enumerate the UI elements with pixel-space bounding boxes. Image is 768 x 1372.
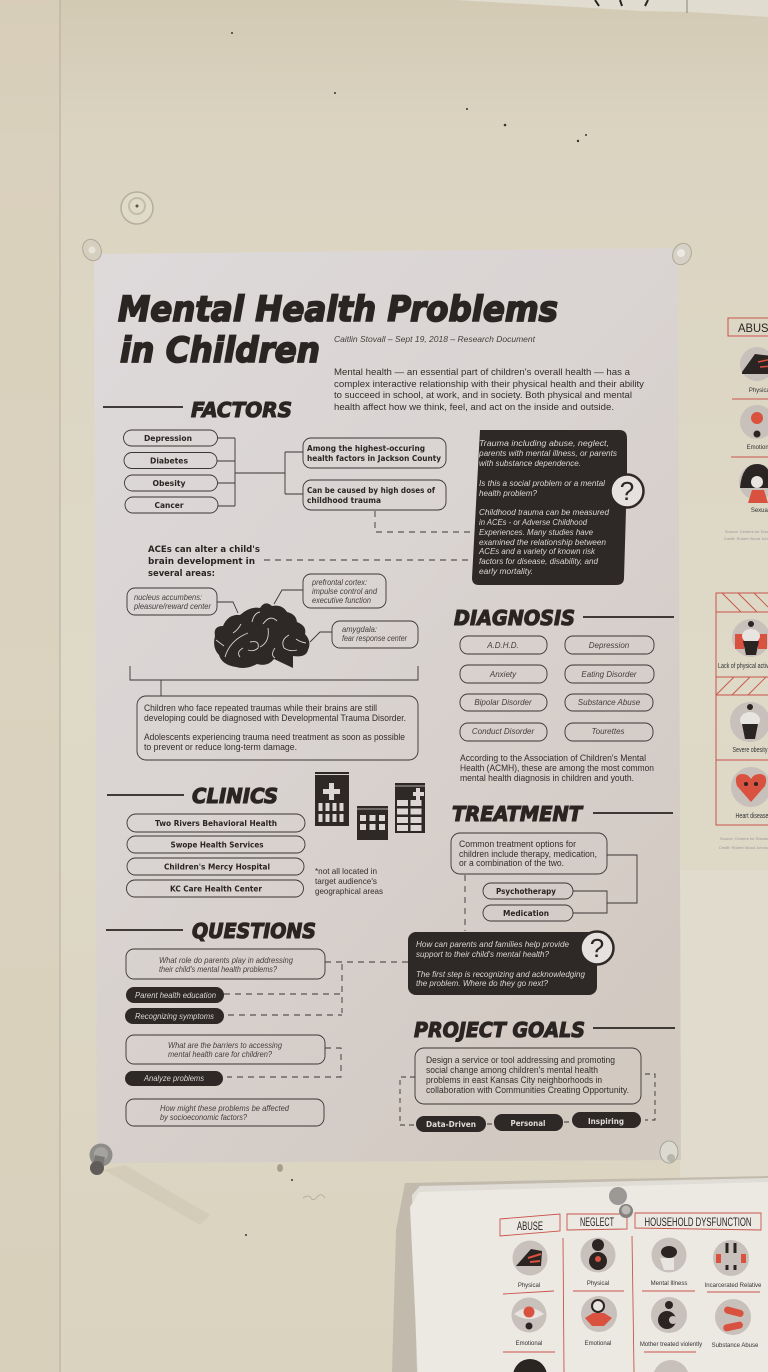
brain labels: nucleus accumbens: [134,592,202,602]
diagnosis note [460,753,654,783]
bottom poster: category headers: NEGLECT [580,1215,614,1229]
bottom poster: category headers: ABUSE [517,1219,543,1233]
project goals box [415,1048,641,1104]
panel: developmental trauma note: developing could be diagnosed with Developmental Trauma Disorder. [144,713,406,723]
diagnosis pills: Bipolar Disorder [474,698,532,707]
question boxes: What are the barriers to accessing [168,1040,282,1050]
factor callouts: Can be caused by high doses of [307,486,435,495]
clinic pills [126,814,305,897]
panel: parents support dark box: The first step is recognizing and acknowledging [416,969,585,979]
question sub-pills [125,987,224,1086]
icon: question mark badge: ? [620,476,634,506]
top edge of another poster [455,0,768,17]
factor callouts: Among the highest-occuring [307,444,425,453]
heading: diagnosis: DIAGNOSIS [454,606,575,630]
icon: brain [214,603,309,668]
project goal pills: Inspiring [588,1117,624,1126]
heading: factors: FACTORS [191,398,292,422]
heading: questions: QUESTIONS [192,919,316,943]
ACEs statement: ACEs can alter a child's [148,545,260,555]
clinic pills: Swope Health Services [170,840,264,850]
bottom poster: ACE labels: Incarcerated Relative [705,1283,762,1289]
question boxes: How might these problems be affected [160,1103,289,1113]
ACEs statement [148,545,260,579]
bottom poster: category headers [500,1213,761,1372]
factor callouts: health factors in Jackson County [307,454,442,463]
pin: top left [79,236,105,264]
panel: trauma dark box [472,430,627,585]
treatment options box [451,833,607,874]
brain labels: pleasure/reward center [133,601,212,611]
heading: project goals: PROJECT GOALS [414,1018,585,1042]
bottom poster: ACE labels: Physical [587,1281,609,1287]
dashed link to trauma panel [375,511,470,532]
panel: trauma dark box: ACEs and a variety of known risk [478,546,596,556]
bottom poster: ACE labels: Physical [518,1283,540,1289]
byline: Caitlin Stovall – Sept 19, 2018 – Research Document [334,334,536,344]
bottom poster: ACE labels: Substance Abuse [712,1343,759,1349]
diagnosis note: Health (ACMH), these are among the most common [460,763,654,773]
project goal pills: Personal [510,1119,546,1128]
panel: trauma dark box: health problem? [479,488,537,498]
diagnosis pills: Eating Disorder [581,670,637,679]
brain labels: amygdala: [342,624,377,634]
project goals box: social change among children's mental health [426,1065,598,1075]
project goals box: problems in east Kansas City neighborhoods in [426,1075,602,1085]
icon: question mark badge: ? [590,933,604,963]
factor callouts: childhood trauma [307,496,381,505]
bottom poster: ACE labels [503,1281,762,1352]
brain labels: impulse control and [312,586,377,596]
treatment options box: children include therapy, medication, [459,849,597,859]
clinic footnote: *not all located in [315,866,377,876]
intro text: to succeed in school, at work, and in society. Both physical and mental [334,390,632,400]
panel: trauma dark box: in ACEs - or Adverse Childhood [479,517,587,527]
project goals box: collaboration with Communities Creating Opportunity. [426,1085,629,1095]
bracket connector [130,666,418,696]
title: in Children [120,331,320,371]
panel: trauma dark box: Trauma including abuse, neglect, [479,438,609,448]
factor pills: Depression [144,434,192,443]
panel: trauma dark box: Experiences. Many studies have [479,527,593,537]
diagnosis pills: Substance Abuse [578,698,641,707]
question boxes: their child's mental health problems? [159,964,277,974]
panel: trauma dark box: with substance dependence. [479,458,581,468]
brain labels: executive function [312,595,371,605]
question boxes: What role do parents play in addressing [159,955,293,965]
pin: bottom right [660,1141,678,1163]
treatment options box: Common treatment options for [459,839,576,849]
question sub-pills: Recognizing symptoms [135,1011,215,1021]
icon: clinic buildings [315,772,425,840]
treatment options box: or a combination of the two. [459,858,564,868]
main poster sheet [94,248,681,1163]
diagnosis pills: A.D.H.D. [486,641,519,650]
brain labels [127,574,418,648]
clinic pills: Two Rivers Behavioral Health [155,819,277,828]
bottom poster: ACE labels: Emotional [585,1341,611,1347]
factor pills [124,430,218,513]
bottom poster: paper stack [392,1176,768,1372]
project goals box: Design a service or tool addressing and promoting [426,1055,615,1065]
ACEs statement: brain development in [148,557,255,567]
brain labels: fear response center [342,633,408,643]
question boxes: mental health care for children? [168,1049,272,1059]
heading: treatment: TREATMENT [452,802,583,826]
bottom poster: ACE labels: Mental Illness [651,1281,687,1287]
panel: parents support dark box: support to their child's mental health? [416,949,549,959]
intro text [334,367,645,412]
diagnosis pills [460,636,654,741]
question dashed links [224,962,408,1077]
pin: top right [669,240,695,268]
treatment pills: Psychotherapy [496,887,557,896]
right poster: lifestyle panel [716,593,768,850]
diagnosis pills: Conduct Disorder [472,727,534,736]
panel: parents support dark box: the problem. Where do they go next? [416,978,548,988]
factor pills: Obesity [152,479,186,488]
intro text: Mental health — an essential part of children's overall health — has a [334,367,630,377]
clinic footnote [315,866,383,896]
panel: developmental trauma note: Children who face repeated traumas while their brains are still [144,703,377,713]
question sub-pills: Analyze problems [143,1073,205,1083]
panel: trauma dark box: factors for disease, disability, and [479,556,598,566]
title [118,290,558,371]
intro text: complex interactive relationship with their physical health and their ability [334,379,645,389]
project goal dashed links [400,1074,655,1125]
factor connector [217,438,303,506]
diagnosis pills: Depression [589,641,630,650]
factor pills: Diabetes [150,456,188,466]
project goal pills: Data-Driven [426,1120,476,1129]
pin: bottom left [90,1144,112,1175]
question boxes [126,949,325,1126]
dashed link from ACEs to panel [264,559,470,561]
panel: developmental trauma note [137,696,418,760]
clinic footnote: geographical areas [315,886,383,896]
panel: developmental trauma note: Adolescents experiencing trauma need treatment as soon as possible [144,732,405,742]
diagnosis pills: Anxiety [489,670,517,679]
bottom poster: ACE labels: Emotional [516,1341,542,1347]
ACEs statement: several areas: [148,569,215,579]
heading: clinics: CLINICS [192,784,278,808]
factor pills: Cancer [154,501,184,510]
panel: developmental trauma note: to prevent or reduce long-term damage. [144,742,297,752]
icon: question mark badge [610,474,644,508]
diagnosis note: According to the Association of Children's Mental [460,753,646,763]
treatment pills: Medication [503,909,549,918]
bottom poster: ACE labels: Mother treated violently [640,1342,702,1348]
factor callouts [303,438,446,510]
panel: trauma dark box: early mortality. [479,566,533,576]
treatment pills [483,883,573,921]
intro text: health affect how we think, feel, and act on the inside and outside. [334,402,614,412]
panel: parents support dark box: How can parents and families help provide [416,939,569,949]
panel: trauma dark box: parents with mental illness, or parents [478,448,618,458]
panel: trauma dark box: examined the relationship between [479,537,606,547]
panel: trauma dark box: Is this a social problem or a mental [479,478,606,488]
icon: question mark badge [580,932,614,964]
diagnosis pills: Tourettes [591,727,625,736]
panel: trauma dark box: Childhood trauma can be measured [479,507,609,517]
panel: parents support dark box [408,932,597,995]
wall hole [121,192,153,224]
clinic pills: Children's Mercy Hospital [164,862,270,872]
question sub-pills: Parent health education [135,990,216,1000]
right poster: abuse panel [724,318,768,541]
project goal pills [416,1112,641,1132]
diagnosis note: mental health diagnosis in children and youth. [460,773,634,783]
pin: bottom poster [609,1187,633,1218]
clinic footnote: target audience's [315,876,377,886]
title: Mental Health Problems [118,290,558,330]
bottom poster: ACE icons [512,1238,751,1372]
question boxes: by socioeconomic factors? [160,1112,247,1122]
clinic pills: KC Care Health Center [170,884,262,894]
treatment connector [573,855,637,913]
brain labels: prefrontal cortex: [311,577,367,587]
dashed link to support panel [464,875,466,931]
